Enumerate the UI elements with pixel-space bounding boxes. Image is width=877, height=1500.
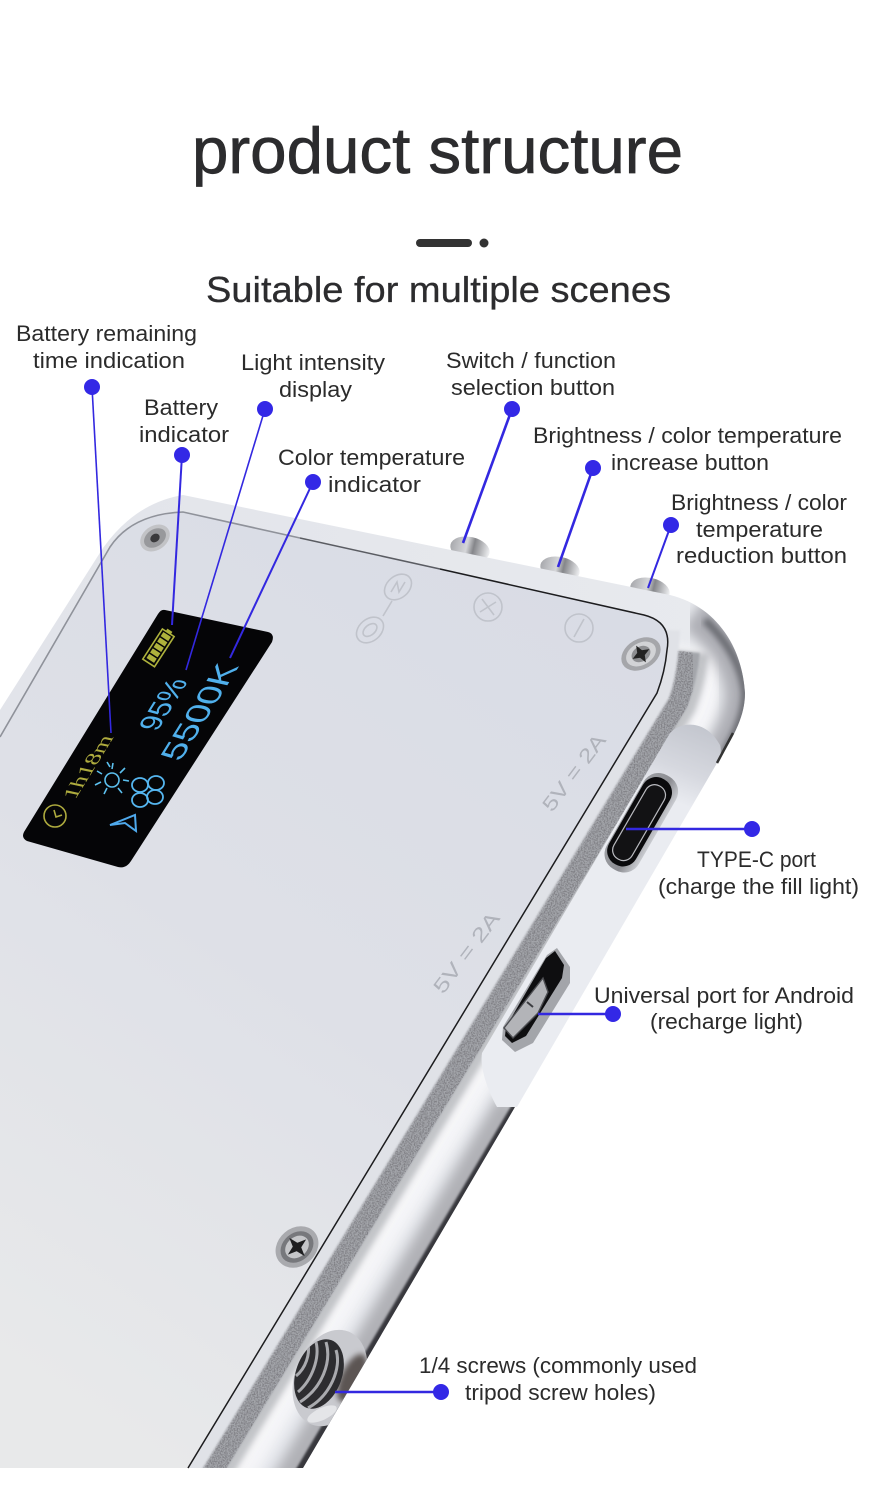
display: time remaining: 1h18m xyxy=(58,733,119,801)
callout: battery indicator: Battery xyxy=(144,395,218,420)
callout: increase button: increase button xyxy=(611,450,769,475)
type-C port xyxy=(598,767,684,879)
callout: tripod screw hole: tripod screw holes) xyxy=(465,1380,656,1405)
metal rim bands xyxy=(202,604,745,1468)
side buttons xyxy=(448,533,672,606)
callout: increase button xyxy=(533,423,842,567)
device: LED fill light xyxy=(0,495,745,1500)
callout: color temperature xyxy=(230,445,465,658)
callout: reduction button: Brightness / color xyxy=(671,490,847,515)
callout: light intensity: display xyxy=(279,377,352,402)
callout: reduction button: reduction button xyxy=(676,543,847,568)
display: clover icon xyxy=(132,776,164,807)
engraved 5V 2A lower: 5V = 2A xyxy=(429,907,505,998)
panel outline xyxy=(0,512,668,1468)
callout: color temperature: Color temperature xyxy=(278,445,465,470)
callout: android port: (recharge light) xyxy=(650,1009,803,1034)
display: arrow icon xyxy=(110,815,136,831)
callout: reduction button: temperature xyxy=(696,517,823,542)
display: battery icon xyxy=(143,626,176,667)
engraved icons on panel xyxy=(351,569,593,648)
callout: switch button: Switch / function xyxy=(446,348,616,373)
tripod screw hole xyxy=(292,1330,368,1426)
callout: switch button xyxy=(446,348,616,543)
callout: switch button: selection button xyxy=(451,375,615,400)
divider mark xyxy=(416,238,488,248)
callout: type-C port xyxy=(626,821,859,899)
callout: tripod screw hole xyxy=(335,1353,697,1405)
callout: battery indicator xyxy=(139,395,229,625)
screw lower xyxy=(267,1218,327,1276)
callout: battery remaining time xyxy=(16,321,197,733)
callout: light intensity xyxy=(186,350,385,670)
callout: battery indicator: indicator xyxy=(139,422,229,447)
display: sun icon xyxy=(95,762,129,794)
callout: reduction button xyxy=(648,490,847,588)
callout: type-C port: (charge the fill light) xyxy=(658,874,859,899)
screw top right xyxy=(615,631,667,677)
callout: battery remaining time: time indication xyxy=(33,348,185,373)
display: brightness percent: 95% xyxy=(133,676,195,733)
title: product structure xyxy=(192,114,683,187)
back panel xyxy=(0,512,668,1468)
callout: tripod screw hole: 1/4 screws (commonly used xyxy=(419,1353,697,1378)
device body xyxy=(0,495,745,1468)
subtitle: Suitable for multiple scenes xyxy=(206,269,671,310)
callout: light intensity: Light intensity xyxy=(241,350,385,375)
callout: android port xyxy=(538,983,854,1034)
callout: increase button: Brightness / color temperature xyxy=(533,423,842,448)
callout: color temperature: indicator xyxy=(328,472,421,497)
screw top left xyxy=(135,519,175,557)
OLED display xyxy=(23,610,273,867)
callout: battery remaining time: Battery remaining xyxy=(16,321,197,346)
callout: android port: Universal port for Android xyxy=(594,983,854,1008)
engraved 5V 2A upper: 5V = 2A xyxy=(538,729,611,816)
callout: type-C port: TYPE-C port xyxy=(697,847,816,872)
display: clock icon xyxy=(44,805,66,827)
micro USB port xyxy=(502,948,570,1052)
flat port section xyxy=(482,725,721,1107)
display: color temperature: 5500K xyxy=(153,660,246,763)
